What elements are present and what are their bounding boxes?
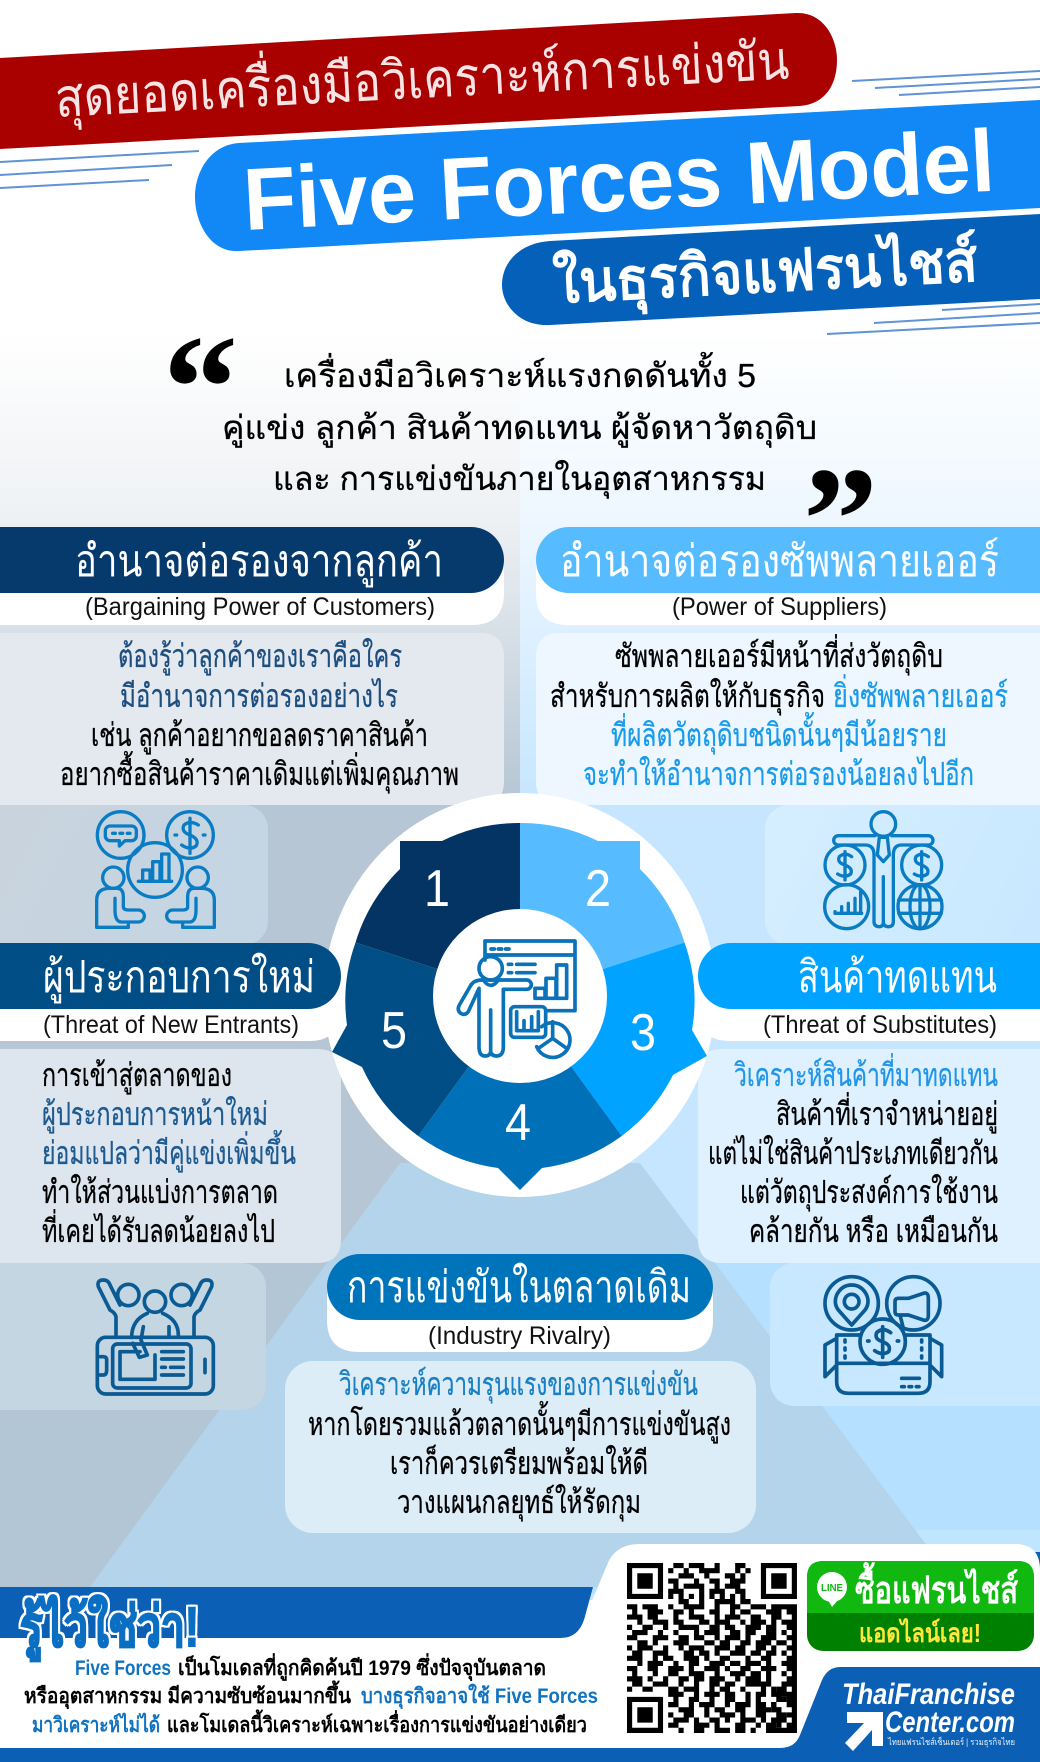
icon backdrop: new entrants	[0, 1263, 266, 1410]
header: new entrants	[0, 943, 341, 1041]
header: customers	[0, 527, 504, 625]
did you know: บางธุรกิจอาจใช้ Five Forces	[361, 1683, 598, 1710]
logo: ThaiFranchise Center: ไทยแฟรนไชส์เซ็นเตอร์ | รวมธุรกิจไทย	[887, 1735, 1015, 1748]
icon: LINE	[817, 1572, 847, 1607]
header: substitutes: (Threat of Substitutes)	[763, 1011, 997, 1039]
panel body: substitutes	[698, 1049, 1040, 1263]
panel body: new entrants	[0, 1049, 341, 1263]
icon: suppliers	[825, 812, 942, 929]
number 4: 4	[505, 1094, 531, 1152]
wheel segment 2	[520, 823, 684, 996]
header: industry rivalry	[327, 1254, 713, 1352]
icon backdrop: customers	[0, 805, 268, 945]
header: suppliers: (Power of Suppliers)	[672, 593, 887, 621]
did you know: Five Forces	[75, 1657, 171, 1680]
panel body: customers: มีอำนาจการต่อรองอย่างไร	[120, 678, 398, 714]
did you know: เป็นโมเดลที่ถูกคิดค้นปี 1979 ซึ่งปัจจุบันตลาด	[178, 1652, 546, 1682]
did you know: และโมเดลนี้วิเคราะห์เฉพาะเรื่องการแข่งขันอย่างเดียว	[167, 1709, 587, 1737]
header: industry rivalry: การแข่งขันในตลาดเดิม	[347, 1262, 691, 1312]
panel body: suppliers: ที่ผลิตวัตถุดิบชนิดนั้นๆมีน้อยราย	[611, 712, 947, 755]
panel body: customers	[0, 633, 504, 805]
heading: did you know: รู้ไว้ใช่ว่า!	[20, 1594, 199, 1662]
panel body: customers: อยากซื้อสินค้าราคาเดิมแต่เพิ่มคุณภาพ	[60, 751, 459, 794]
did you know: หรืออุตสาหกรรม มีความซับซ้อนมากขึ้น	[24, 1680, 352, 1710]
header: suppliers	[536, 527, 1040, 625]
panel body: new entrants: ที่เคยได้รับลดน้อยลงไป	[42, 1209, 275, 1249]
did you know: มาวิเคราะห์ไม่ได้	[32, 1712, 160, 1737]
header: customers: อำนาจต่อรองจากลูกค้า	[75, 537, 443, 588]
five forces wheel	[332, 823, 707, 1190]
icon: customers	[97, 812, 214, 927]
panel body: industry rivalry: หากโดยรวมแล้วตลาดนั้นๆมีการแข่งขันสูง	[308, 1401, 731, 1444]
header: new entrants: ผู้ประกอบการใหม่	[43, 952, 315, 1004]
number 1: 1	[424, 860, 450, 918]
intro quote: และ การแข่งขันภายในอุตสาหกรรม	[273, 460, 766, 499]
icon: presenter	[458, 941, 575, 1057]
LINE call to action: แอดไลน์เลย!	[859, 1617, 981, 1648]
header: industry rivalry: (Industry Rivalry)	[428, 1322, 611, 1350]
panel body: industry rivalry: วางแผนกลยุทธ์ให้รัดกุม	[397, 1484, 641, 1522]
panel body: suppliers: สำหรับการผลิตให้กับธุรกิจ	[550, 678, 825, 716]
title banner: in franchise business	[502, 214, 1040, 325]
panel body: customers: เช่น ลูกค้าอยากขอลดราคาสินค้า	[91, 717, 428, 755]
icon: substitutes	[825, 1277, 942, 1393]
panel body: new entrants: การเข้าสู่ตลาดของ	[42, 1057, 232, 1095]
header: substitutes	[698, 943, 1040, 1041]
number 2: 2	[585, 860, 611, 918]
number 3: 3	[630, 1004, 656, 1062]
wheel segment 4	[418, 996, 622, 1190]
number 5: 5	[381, 1002, 407, 1060]
title banner: Five Forces Model: Five Forces Model	[241, 111, 997, 249]
panel body: new entrants: ทำให้ส่วนแบ่งการตลาด	[42, 1174, 278, 1210]
did you know	[20, 1594, 598, 1737]
panel body: suppliers	[536, 633, 1040, 805]
wheel: white ring	[324, 793, 716, 1197]
opening quote mark: “	[163, 305, 238, 471]
title banner: in franchise business: ในธุรกิจแฟรนไชส์	[551, 227, 980, 320]
panel body: customers: ต้องรู้ว่าลูกค้าของเราคือใคร	[118, 638, 402, 676]
wheel segment 5	[332, 942, 520, 1136]
title banner: red: สุดยอดเครื่องมือวิเคราะห์การแข่งขัน	[53, 23, 791, 132]
intro quote: เครื่องมือวิเคราะห์แรงกดดันทั้ง 5	[284, 352, 756, 394]
wheel segment 1	[356, 823, 520, 996]
title banner: red	[0, 13, 837, 149]
bottom white panel	[0, 1544, 1040, 1748]
icon: LINE: LINE	[821, 1583, 843, 1594]
QR code	[627, 1566, 797, 1730]
intro quote	[163, 305, 878, 603]
closing quote mark: ”	[803, 437, 878, 603]
icon: arrow	[845, 1712, 883, 1751]
icon: new entrants	[97, 1280, 213, 1394]
icon backdrop: suppliers	[765, 805, 1040, 945]
LINE call to action	[807, 1561, 1034, 1651]
panel body: new entrants: ผู้ประกอบการหน้าใหม่	[42, 1096, 268, 1134]
panel body: new entrants: ย่อมแปลว่ามีคู่แข่งเพิ่มขึ้น	[42, 1130, 296, 1173]
panel body: industry rivalry: วิเคราะห์ความรุนแรงของการแข่งขัน	[339, 1366, 698, 1404]
panel body: suppliers: ซัพพลายเออร์มีหน้าที่ส่งวัตถุดิบ	[615, 634, 943, 676]
header: new entrants: (Threat of New Entrants)	[43, 1011, 299, 1039]
icon backdrop: substitutes	[770, 1263, 1040, 1406]
panel body: industry rivalry	[285, 1361, 756, 1533]
logo: ThaiFranchise Center	[780, 1667, 1040, 1762]
intro quote: คู่แข่ง ลูกค้า สินค้าทดแทน ผู้จัดหาวัตถุดิบ	[222, 409, 817, 448]
bottom blue band	[0, 1587, 593, 1638]
logo: ThaiFranchise Center: ThaiFranchise	[842, 1678, 1015, 1711]
panel body: industry rivalry: เราก็ควรเตรียมพร้อมให้ดี	[390, 1444, 648, 1481]
header: customers: (Bargaining Power of Customers)	[85, 593, 435, 621]
wheel segment 3	[520, 942, 707, 1136]
